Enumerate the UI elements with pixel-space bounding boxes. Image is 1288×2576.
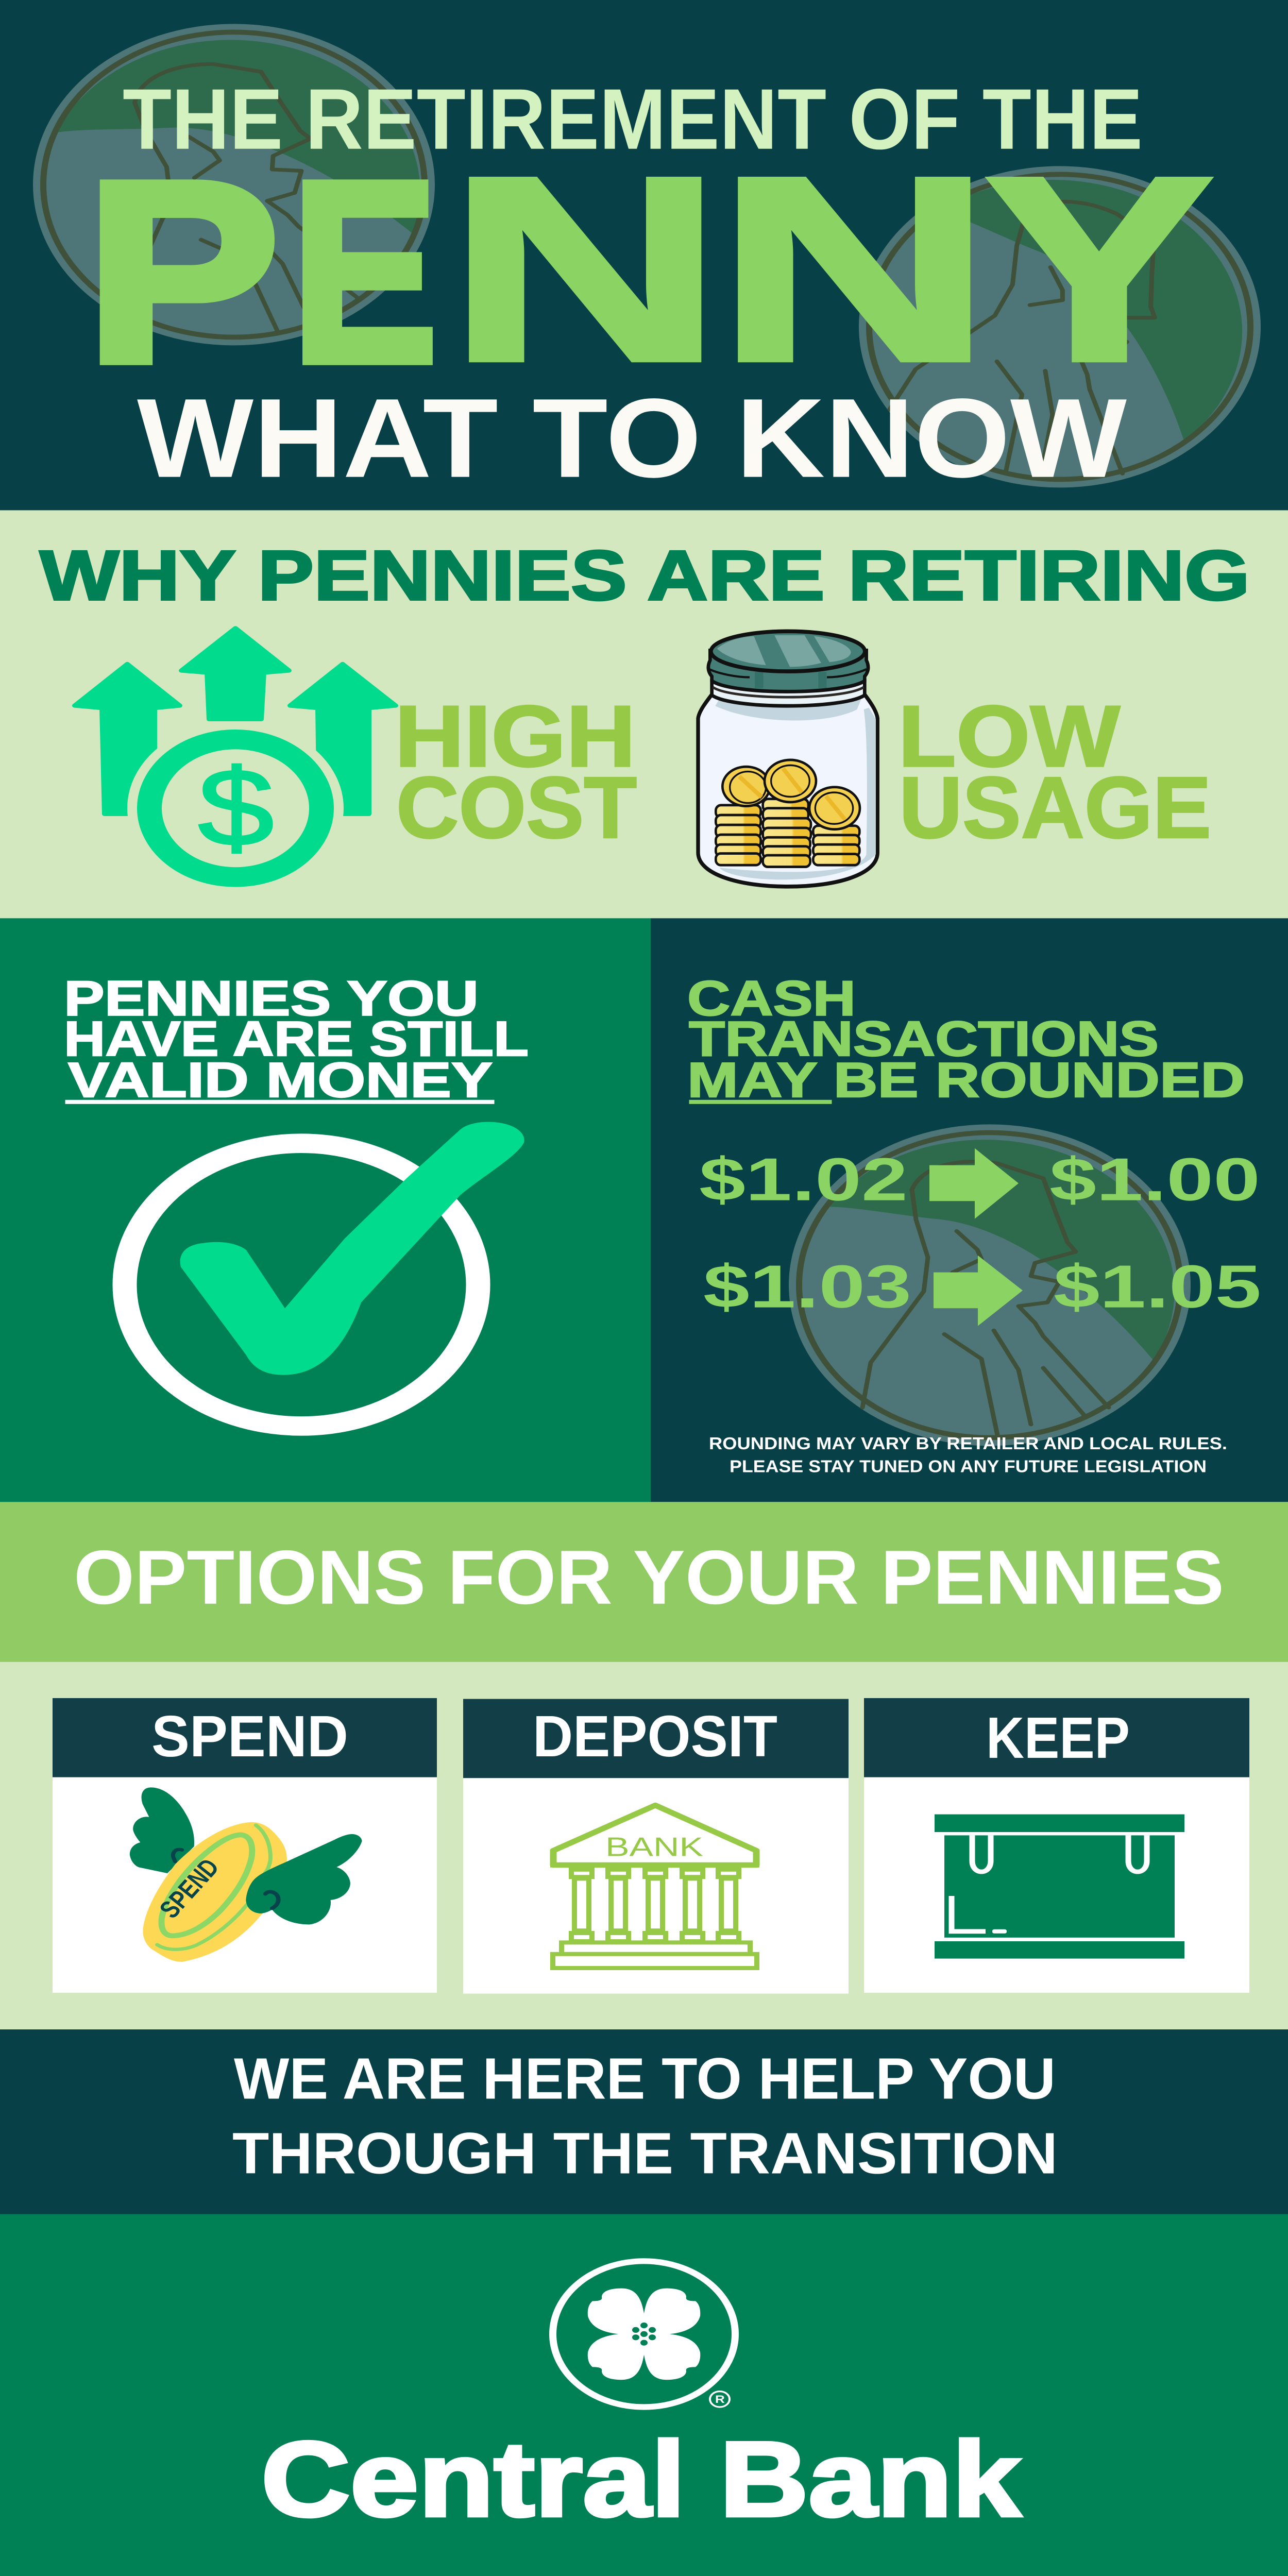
icon: jar of coins	[698, 631, 877, 887]
heading: pennies you have are still valid money	[64, 971, 529, 1107]
text: we are here to help you: WE ARE HERE TO HELP YOU	[234, 2046, 1056, 2111]
icon: storage box	[935, 1815, 1184, 1959]
panel: why pennies are retiring	[0, 510, 1288, 918]
heading: cash transactions may be rounded: MAY BE ROUNDED	[687, 1052, 1245, 1107]
card: deposit: DEPOSIT	[533, 1704, 777, 1769]
heading: cash transactions may be rounded: TRANSACTIONS	[689, 1011, 1159, 1066]
card: spend	[53, 1698, 437, 1993]
icon: flying coin	[130, 1787, 362, 1962]
footnote: rounding disclaimer: PLEASE STAY TUNED ON ANY FUTURE LEGISLATION	[730, 1457, 1207, 1477]
title word: penny: P	[86, 129, 279, 415]
icon: rising cost coin with arrows	[75, 628, 396, 895]
icon: flying coin: SPEND	[152, 1855, 226, 1922]
title word: penny	[86, 122, 1215, 416]
panel: pennies still valid	[0, 918, 651, 1502]
decorative coin: top right	[804, 123, 1288, 531]
panel: option cards	[0, 1662, 1288, 2029]
panel: cash transactions may be rounded	[651, 918, 1288, 1502]
rounding example: 1.03 to 1.05: $1.05	[1054, 1253, 1261, 1320]
title word: penny: Y	[984, 122, 1215, 416]
title word: penny: N	[715, 122, 993, 416]
card: keep: KEEP	[986, 1705, 1130, 1771]
logo: flower emblem	[553, 2261, 735, 2407]
heading: pennies you have are still valid money: VALID MONEY	[68, 1052, 493, 1107]
rounding example: 1.03 to 1.05: $1.03	[703, 1253, 911, 1320]
icon: bank building: BANK	[605, 1832, 703, 1862]
footnote: rounding disclaimer	[709, 1434, 1227, 1477]
card: spend: SPEND	[151, 1704, 348, 1769]
rounding example: 1.02 to 1.00: $1.00	[1049, 1146, 1260, 1213]
decorative coin: top left	[0, 0, 469, 373]
subtitle: what to know: WHAT TO KNOW	[137, 376, 1127, 501]
label: high cost: HIGH	[395, 688, 636, 785]
panel: help message	[0, 2029, 1288, 2214]
icon: rising cost coin with arrows: $	[198, 747, 274, 869]
icon: check mark in circle	[125, 1122, 524, 1426]
rounding example: 1.02 to 1.00: $1.02	[699, 1146, 908, 1213]
label: low usage: LOW	[898, 688, 1121, 785]
title word: penny: E	[292, 129, 437, 415]
title word: penny: N	[446, 122, 724, 416]
logo: registered mark	[710, 2392, 730, 2407]
label: low usage	[898, 688, 1211, 856]
heading: cash transactions may be rounded: CASH	[687, 971, 856, 1026]
panel: options banner	[0, 1502, 1288, 1662]
label: high cost	[395, 688, 637, 856]
panel: header	[0, 0, 1288, 531]
logo wordmark: central bank: Central Bank	[261, 2420, 1021, 2538]
heading: pennies you have are still valid money: PENNIES YOU	[64, 971, 479, 1026]
panel: footer logo	[0, 2214, 1288, 2576]
card: deposit	[463, 1699, 849, 1994]
rounding example: 1.03 to 1.05	[703, 1253, 1261, 1326]
decorative coin: rounding panel	[789, 1124, 1191, 1446]
heading: pennies you have are still valid money: HAVE ARE STILL	[64, 1011, 529, 1066]
heading: cash transactions may be rounded	[687, 971, 1245, 1107]
card: keep	[864, 1698, 1249, 1993]
text: through the transition: THROUGH THE TRANSITION	[232, 2121, 1058, 2186]
logo: registered mark: R	[715, 2393, 725, 2405]
heading: why pennies are retiring: WHY PENNIES ARE RETIRING	[40, 536, 1250, 615]
label: high cost: COST	[396, 759, 637, 856]
label: low usage: USAGE	[899, 759, 1211, 856]
icon: bank building	[550, 1805, 759, 1968]
rounding example: 1.02 to 1.00	[699, 1146, 1260, 1219]
